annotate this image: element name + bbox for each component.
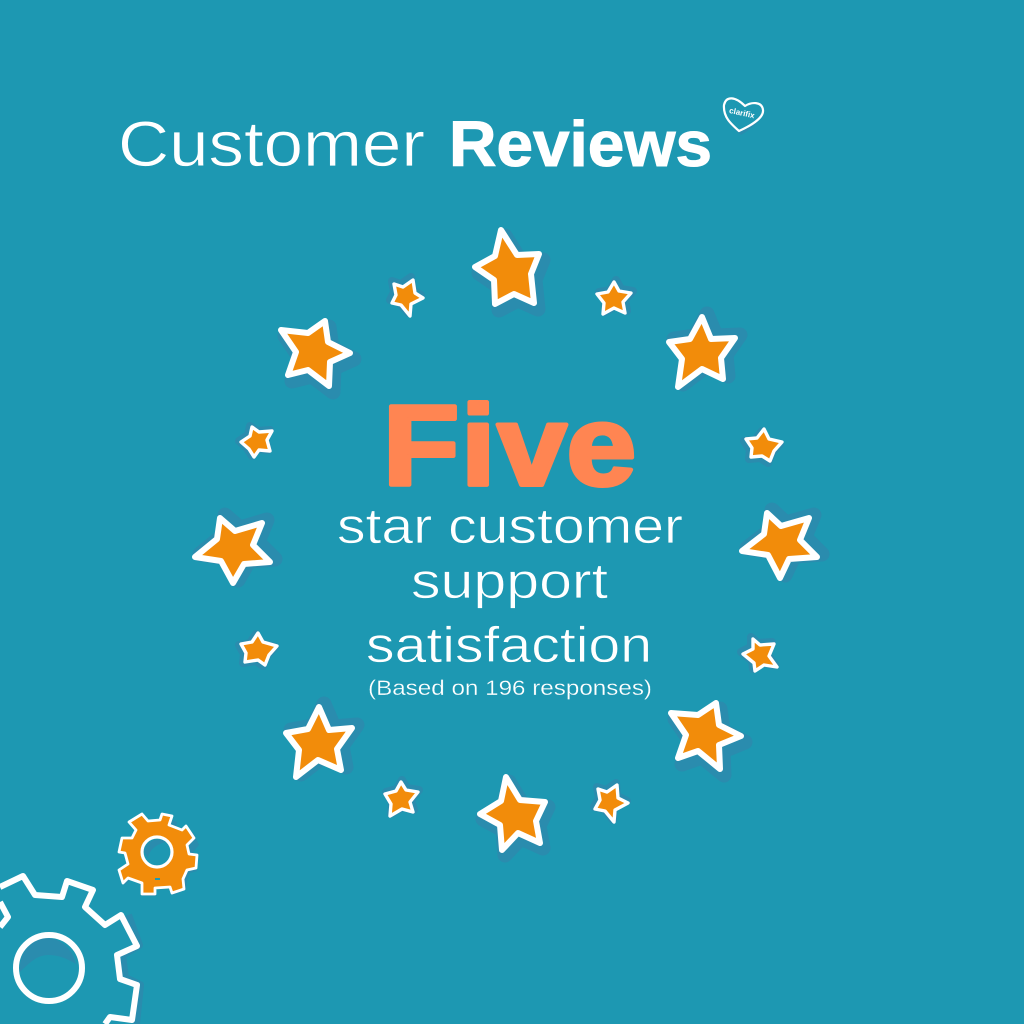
small star bottom left (385, 780, 419, 816)
title (118, 108, 712, 180)
text block: satisfaction statement: satisfaction (366, 617, 652, 673)
large star upper left (281, 321, 354, 392)
small star left upper (239, 426, 272, 457)
title: Reviews (449, 108, 712, 180)
text block: satisfaction statement (337, 498, 683, 700)
small star left lower (239, 633, 277, 666)
small star upper left (390, 277, 423, 316)
title: Customer (118, 108, 425, 180)
large star lower right (671, 703, 745, 775)
small star top right (597, 280, 633, 314)
large star top (475, 230, 543, 310)
icon: clarifix heart logo (724, 98, 763, 135)
large star upper right (669, 314, 740, 387)
icon: clarifix heart logo: clarifix (728, 106, 756, 120)
headline: Five: Five (383, 383, 636, 510)
small star right lower (741, 637, 777, 671)
star ring (195, 230, 822, 855)
text block: satisfaction statement: (Based on 196 responses) (368, 677, 652, 700)
large star bottom (480, 777, 548, 855)
small star right upper (744, 429, 782, 463)
large star left (195, 515, 275, 583)
icon: large outline gear (0, 876, 140, 1024)
icon: small orange gear (119, 814, 199, 896)
large star right (742, 510, 822, 578)
text block: satisfaction statement: star customer (337, 498, 683, 554)
small star bottom right (594, 783, 628, 822)
large star lower left (286, 704, 357, 777)
text block: satisfaction statement: support (411, 553, 608, 609)
